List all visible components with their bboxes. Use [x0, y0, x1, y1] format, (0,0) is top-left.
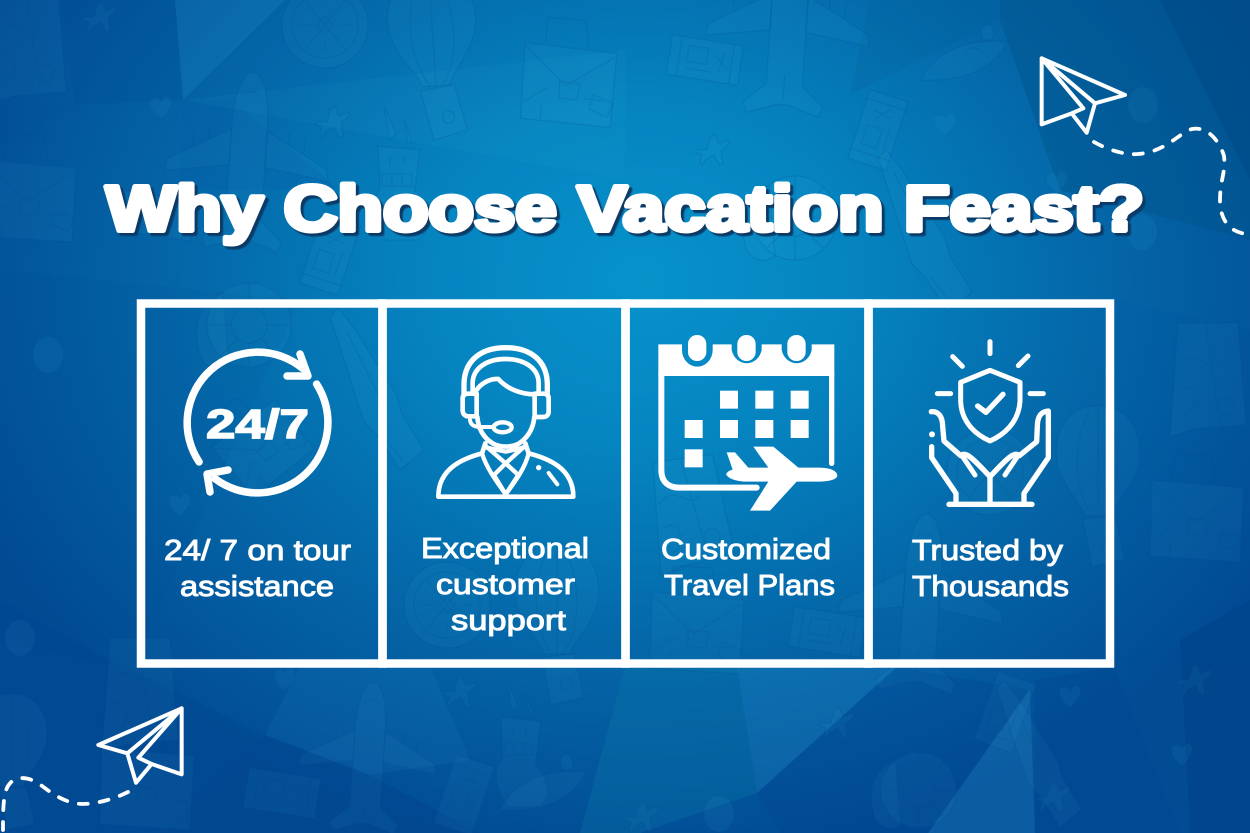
dashed flight path: bottom left [3, 778, 128, 830]
label: exceptional customer support: customer [436, 569, 575, 601]
label: 24/7 on tour assistance [164, 535, 351, 603]
paper plane: top right [1042, 58, 1125, 133]
panel: customized travel plans [626, 304, 868, 664]
label: trusted by thousands: Thousands [912, 571, 1069, 603]
icon: support agent with headset [438, 348, 573, 497]
label: trusted by thousands [912, 535, 1069, 603]
panel: trusted by thousands [868, 304, 1110, 664]
panel: exceptional customer support [382, 304, 626, 664]
label: 24/7 on tour assistance: 24/ 7 on tour [164, 535, 351, 567]
icon: calendar with airplane [658, 335, 837, 511]
label: exceptional customer support [421, 533, 589, 637]
icon: 24/7 circular arrows: 24/7 [206, 401, 309, 447]
icon: 24/7 circular arrows [187, 352, 328, 493]
label: 24/7 on tour assistance: assistance [180, 571, 334, 603]
title: Why Choose Vacation Feast? [106, 172, 1144, 244]
label: customized travel plans: Customized [661, 534, 831, 566]
label: customized travel plans: Travel Plans [664, 570, 835, 602]
dashed flight path: top right [1094, 129, 1247, 234]
label: customized travel plans [661, 534, 835, 602]
panel: 24/7 on tour assistance [141, 304, 382, 664]
label: trusted by thousands: Trusted by [912, 535, 1064, 567]
label: exceptional customer support: Exceptional [421, 533, 589, 565]
paper plane: bottom left [98, 708, 182, 783]
icon: shield held by hands [929, 342, 1048, 504]
label: exceptional customer support: support [451, 605, 566, 637]
